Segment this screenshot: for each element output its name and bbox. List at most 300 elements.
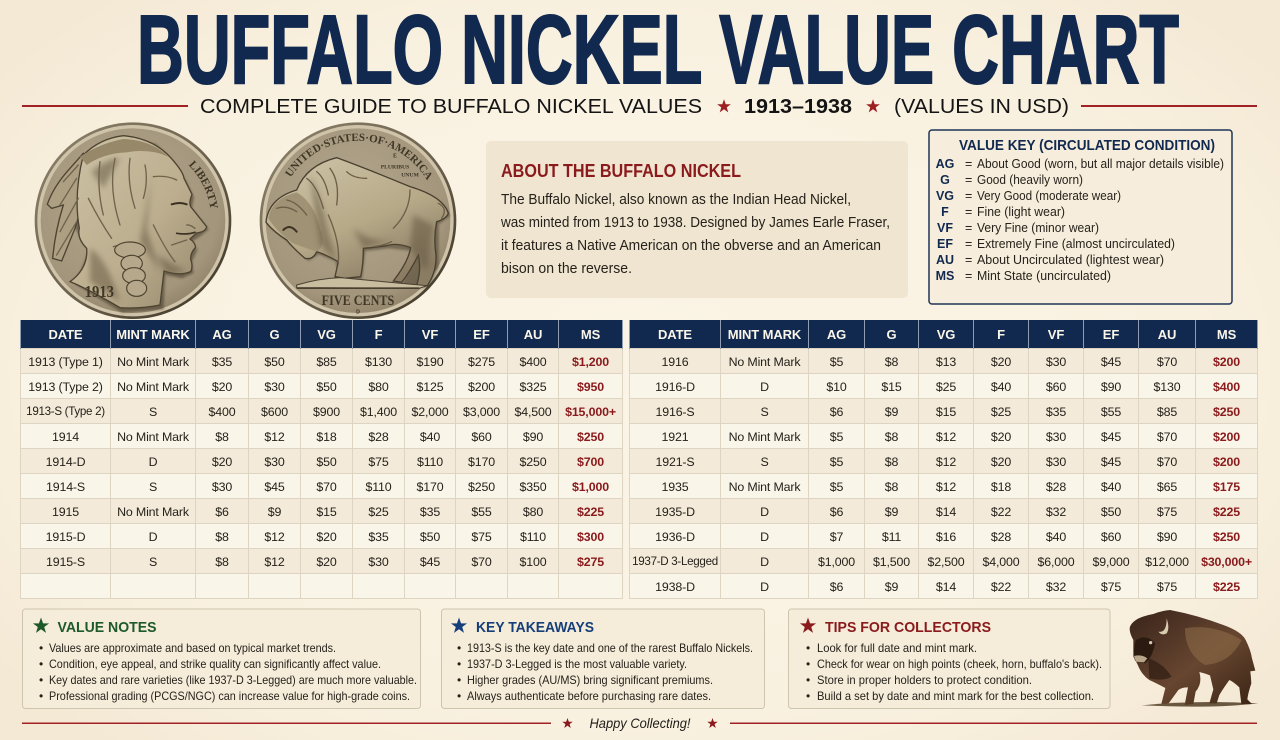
value key definitions: =	[965, 237, 972, 251]
table: 1913 to 1915 values: 1913-S (Type 2)	[26, 405, 105, 418]
table: 1913 to 1915 values: S	[149, 404, 157, 418]
table: 1916 to 1938 values: $40	[1046, 530, 1066, 544]
table: 1916 to 1938 values: D	[760, 504, 769, 518]
tips list: Look for full date and mint mark.	[817, 641, 977, 655]
table: 1913 to 1915 values: $50	[420, 530, 440, 544]
table: 1916 to 1938 values: $9,000	[1092, 554, 1130, 568]
table: 1916 to 1938 values: AG	[827, 326, 846, 342]
table: 1913 to 1915 values: $20	[212, 454, 232, 468]
about body text: it features a Native American on the obverse and an American	[501, 238, 881, 254]
table: 1913 to 1915 values: $225	[577, 504, 604, 518]
table: 1913 to 1915 values: No Mint Mark	[117, 354, 189, 368]
value key abbreviations: F	[941, 205, 949, 219]
tips list	[806, 641, 1102, 703]
table: 1916 to 1938 values: $12	[936, 480, 956, 494]
table: 1916 to 1938 values: $9	[885, 404, 898, 418]
table: 1916 to 1938 values: AU	[1158, 326, 1176, 342]
table: 1913 to 1915 values: AG	[212, 326, 232, 342]
table: 1913 to 1915 values: $6	[215, 504, 229, 518]
table: 1916 to 1938 values	[629, 320, 1258, 599]
value notes list	[39, 641, 417, 703]
table: 1916 to 1938 values: $15	[936, 404, 956, 418]
table: 1916 to 1938 values: $45	[1101, 354, 1121, 368]
table: 1916 to 1938 values: $9	[885, 504, 898, 518]
table: 1913 to 1915 values: $75	[471, 530, 492, 544]
table: 1916 to 1938 values: S	[760, 404, 769, 418]
icon: blue star	[451, 618, 467, 633]
table: 1916 to 1938 values: $10	[826, 380, 847, 394]
table: 1916 to 1938 values: VG	[937, 326, 955, 342]
table: 1913 to 1915 values: $12	[264, 554, 285, 568]
table: 1916 to 1938 values: $35	[1046, 404, 1066, 418]
table: 1916 to 1938 values: $70	[1157, 430, 1177, 444]
table: 1913 to 1915 values: $80	[523, 504, 543, 518]
table: 1916 to 1938 values: $6	[830, 580, 843, 594]
table: 1916 to 1938 values: $60	[1046, 380, 1066, 394]
illustration: bison	[1130, 610, 1258, 707]
table: 1913 to 1915 values: $950	[577, 380, 604, 394]
table: 1916 to 1938 values: MINT MARK	[728, 326, 801, 342]
table: 1916 to 1938 values: 1935-D	[655, 504, 695, 518]
key takeaways list	[457, 641, 753, 703]
table: 1916 to 1938 values: $75	[1157, 580, 1177, 594]
table: 1916 to 1938 values: $70	[1157, 454, 1177, 468]
table: 1916 to 1938 values: $22	[991, 580, 1011, 594]
value key abbreviations: MS	[936, 269, 954, 283]
table: 1913 to 1915 values: MS	[581, 326, 600, 342]
subtitle with rules and stars: 1913–1938	[744, 96, 852, 118]
table: 1916 to 1938 values: $20	[991, 430, 1011, 444]
table: 1913 to 1915 values: $90	[523, 430, 543, 444]
table: 1916 to 1938 values: $65	[1157, 480, 1177, 494]
value key heading: VALUE KEY (CIRCULATED CONDITION)	[959, 137, 1215, 154]
table: 1916 to 1938 values: $60	[1101, 530, 1121, 544]
table: 1913 to 1915 values: $2,000	[412, 404, 448, 418]
table: 1913 to 1915 values: $15	[316, 504, 337, 518]
panel: value key	[929, 130, 1232, 304]
table: 1913 to 1915 values: $170	[468, 454, 495, 468]
subtitle with rules and stars	[22, 96, 1257, 118]
table: 1913 to 1915 values: $325	[520, 380, 546, 394]
table: 1913 to 1915 values: $600	[261, 404, 288, 418]
table: 1913 to 1915 values: 1915-D	[46, 530, 85, 544]
value key definitions: =	[965, 189, 972, 203]
table: 1913 to 1915 values: $35	[212, 354, 232, 368]
table: 1916 to 1938 values: $200	[1213, 430, 1240, 444]
table: 1916 to 1938 values: 1916	[662, 354, 688, 368]
table: 1916 to 1938 values: DATE	[658, 326, 692, 342]
value key definitions: =	[965, 253, 972, 267]
table: 1913 to 1915 values: $1,200	[572, 354, 609, 368]
table: 1916 to 1938 values: $30,000+	[1201, 554, 1252, 568]
table: 1916 to 1938 values: $20	[991, 454, 1011, 468]
table: 1913 to 1915 values: $85	[316, 354, 337, 368]
table: 1913 to 1915 values: D	[149, 454, 157, 468]
panel: value notes	[22, 609, 420, 708]
table: 1916 to 1938 values: $400	[1213, 380, 1240, 394]
table: 1916 to 1938 values: 1921	[662, 430, 688, 444]
table: 1913 to 1915 values: $125	[417, 380, 443, 394]
value key definitions: About Good (worn, but all major details visible)	[977, 157, 1224, 171]
value notes list: •	[39, 689, 43, 703]
table: 1916 to 1938 values: $5	[830, 480, 843, 494]
table: 1916 to 1938 values: VF	[1048, 326, 1064, 342]
table: 1916 to 1938 values: $16	[936, 530, 956, 544]
table: 1916 to 1938 values: No Mint Mark	[729, 354, 800, 368]
table: 1913 to 1915 values: $8	[215, 430, 229, 444]
table: 1916 to 1938 values: $14	[936, 504, 956, 518]
table: 1916 to 1938 values: 1921-S	[655, 454, 695, 468]
table: 1913 to 1915 values: $3,000	[463, 404, 500, 418]
icon: footer star right	[707, 718, 718, 728]
table: 1913 to 1915 values: $8	[215, 530, 229, 544]
table: 1913 to 1915 values: $190	[417, 354, 443, 368]
value notes list: •	[39, 673, 43, 687]
value key definitions: =	[965, 205, 972, 219]
table: 1916 to 1938 values: $1,000	[818, 554, 855, 568]
table: 1913 to 1915 values: $70	[471, 554, 492, 568]
value key definitions	[965, 157, 1224, 283]
key takeaways list: 1913-S is the key date and one of the rarest Buffalo Nickels.	[467, 641, 753, 655]
table: 1913 to 1915 values: $50	[264, 354, 285, 368]
value key abbreviations: AG	[936, 157, 954, 171]
key takeaways list: •	[457, 657, 461, 671]
table: 1916 to 1938 values: $12	[936, 430, 956, 444]
table: 1913 to 1915 values: F	[375, 326, 382, 342]
table: 1916 to 1938 values: $18	[991, 480, 1011, 494]
table: 1916 to 1938 values: S	[760, 454, 769, 468]
table: 1913 to 1915 values: $400	[209, 404, 235, 418]
table: 1916 to 1938 values: $40	[991, 380, 1011, 394]
table: 1916 to 1938 values: $13	[936, 354, 956, 368]
table: 1916 to 1938 values: $45	[1101, 454, 1121, 468]
table: 1916 to 1938 values: $8	[885, 480, 898, 494]
table: 1913 to 1915 values: $110	[365, 480, 392, 494]
coin: bison reverse: E	[393, 154, 397, 160]
subtitle with rules and stars: (VALUES IN USD)	[894, 96, 1069, 118]
table: 1916 to 1938 values: $6	[830, 404, 843, 418]
table: 1916 to 1938 values: D	[760, 530, 769, 544]
table: 1913 to 1915 values: $275	[577, 554, 604, 568]
table: 1916 to 1938 values: $5	[830, 354, 843, 368]
table: 1916 to 1938 values: $30	[1046, 454, 1066, 468]
coin: bison reverse: UNITED·STATES·OF·AMERICA	[284, 134, 432, 180]
table: 1913 to 1915 values: 1915-S	[46, 554, 85, 568]
table: 1916 to 1938 values: $85	[1157, 404, 1177, 418]
table: 1913 to 1915 values: $20	[316, 530, 337, 544]
table: 1913 to 1915 values: MINT MARK	[116, 326, 190, 342]
table: 1913 to 1915 values: $12	[264, 530, 285, 544]
table: 1913 to 1915 values: $900	[313, 404, 340, 418]
table: 1916 to 1938 values: $32	[1046, 580, 1066, 594]
table: 1916 to 1938 values: MS	[1217, 326, 1236, 342]
table: 1916 to 1938 values: $22	[991, 504, 1011, 518]
value key definitions: Good (heavily worn)	[977, 173, 1083, 187]
table: 1913 to 1915 values	[20, 320, 623, 599]
table: 1913 to 1915 values: $4,500	[514, 404, 552, 418]
about body text: was minted from 1913 to 1938. Designed by James Earle Fraser,	[500, 215, 890, 231]
table: 1913 to 1915 values: S	[149, 554, 157, 568]
key takeaways list: •	[457, 673, 461, 687]
table: 1913 to 1915 values: $35	[368, 530, 389, 544]
table: 1916 to 1938 values: No Mint Mark	[729, 480, 800, 494]
tips heading: TIPS FOR COLLECTORS	[825, 619, 991, 636]
table: 1916 to 1938 values: $70	[1157, 354, 1177, 368]
table: 1916 to 1938 values: $30	[1046, 430, 1066, 444]
value key definitions: Fine (light wear)	[977, 205, 1065, 219]
table: 1913 to 1915 values: 1914-D	[46, 454, 85, 468]
table: 1913 to 1915 values: $30	[212, 480, 232, 494]
value key abbreviations: G	[940, 173, 950, 187]
table: 1916 to 1938 values: $12,000	[1145, 554, 1189, 568]
table: 1913 to 1915 values: No Mint Mark	[117, 504, 189, 518]
table: 1913 to 1915 values: $200	[468, 380, 495, 394]
table: 1916 to 1938 values: $75	[1101, 580, 1121, 594]
table: 1916 to 1938 values: $1,500	[873, 554, 910, 568]
table: 1913 to 1915 values: $100	[520, 554, 546, 568]
tips list: •	[806, 673, 810, 687]
table: 1913 to 1915 values: No Mint Mark	[117, 430, 189, 444]
table: 1916 to 1938 values: 1916-D	[655, 380, 695, 394]
coin: bison reverse: FIVE CENTS	[322, 293, 394, 309]
table: 1916 to 1938 values: $4,000	[982, 554, 1020, 568]
coin: bison reverse	[260, 122, 456, 319]
table: 1916 to 1938 values: 1916-S	[655, 404, 695, 418]
table: 1916 to 1938 values: $6,000	[1038, 554, 1074, 568]
table: 1913 to 1915 values: $30	[264, 380, 285, 394]
table: 1913 to 1915 values: G	[269, 326, 280, 342]
table: 1913 to 1915 values: 1913 (Type 2)	[28, 380, 103, 394]
table: 1913 to 1915 values: $75	[368, 454, 389, 468]
table: 1916 to 1938 values: $250	[1213, 404, 1240, 418]
table: 1913 to 1915 values: $9	[268, 504, 281, 518]
table: 1916 to 1938 values: $55	[1101, 404, 1121, 418]
table: 1913 to 1915 values: $18	[316, 430, 337, 444]
table: 1913 to 1915 values: $110	[417, 454, 443, 468]
table: 1916 to 1938 values: $175	[1213, 480, 1240, 494]
coin: bison reverse: D	[356, 309, 360, 315]
table: 1916 to 1938 values: $20	[991, 354, 1011, 368]
table: 1913 to 1915 values: VF	[422, 326, 438, 342]
value key abbreviations: VF	[937, 221, 953, 235]
coin: bison reverse: PLURIBUS	[381, 164, 409, 170]
value notes list: Condition, eye appeal, and strike quality can significantly affect value.	[49, 657, 381, 671]
table: 1913 to 1915 values: $12	[264, 430, 285, 444]
value key definitions: =	[965, 269, 972, 283]
table: 1916 to 1938 values: $90	[1101, 380, 1121, 394]
table: 1916 to 1938 values: 1937-D 3-Legged	[632, 555, 718, 568]
table: 1916 to 1938 values: 1935	[662, 480, 688, 494]
table: 1913 to 1915 values: $275	[468, 354, 495, 368]
table: 1913 to 1915 values: $1,000	[572, 480, 609, 494]
table: 1913 to 1915 values: $80	[368, 380, 389, 394]
panel: key takeaways	[442, 609, 764, 708]
table: 1913 to 1915 values: $250	[577, 430, 604, 444]
table: 1913 to 1915 values: No Mint Mark	[117, 380, 189, 394]
value notes list: •	[39, 641, 43, 655]
table: 1916 to 1938 values: G	[886, 326, 896, 342]
table: 1916 to 1938 values: EF	[1103, 326, 1119, 342]
value notes list: •	[39, 657, 43, 671]
footer	[22, 715, 1257, 731]
value key abbreviations: EF	[937, 237, 953, 251]
table: 1916 to 1938 values: $6	[830, 504, 843, 518]
table: 1916 to 1938 values: 1938-D	[655, 580, 695, 594]
about body text: bison on the reverse.	[501, 261, 632, 277]
table: 1913 to 1915 values: $45	[264, 480, 285, 494]
table: 1913 to 1915 values: $28	[368, 430, 389, 444]
table: 1916 to 1938 values: $8	[885, 454, 898, 468]
key takeaways list: 1937-D 3-Legged is the most valuable variety.	[467, 657, 687, 671]
tips list: Check for wear on high points (cheek, horn, buffalo's back).	[817, 657, 1102, 671]
coin: Indian Head obverse	[34, 122, 232, 319]
table: 1916 to 1938 values: $200	[1213, 354, 1240, 368]
table: 1913 to 1915 values: $1,400	[360, 404, 397, 418]
table: 1916 to 1938 values: $8	[885, 354, 898, 368]
table: 1913 to 1915 values: $250	[468, 480, 495, 494]
key takeaways list: Higher grades (AU/MS) bring significant premiums.	[467, 673, 713, 687]
table: 1913 to 1915 values: VG	[317, 326, 336, 342]
table: 1913 to 1915 values: 1915	[52, 504, 79, 518]
table: 1916 to 1938 values: $50	[1101, 504, 1121, 518]
table: 1916 to 1938 values: $14	[936, 580, 956, 594]
table: 1913 to 1915 values: $30	[264, 454, 285, 468]
table: 1913 to 1915 values: $70	[316, 480, 337, 494]
table: 1913 to 1915 values: $8	[215, 554, 229, 568]
table: 1913 to 1915 values: $170	[417, 480, 443, 494]
table: 1916 to 1938 values: $15	[881, 380, 902, 394]
value key definitions: =	[965, 157, 972, 171]
table: 1916 to 1938 values: F	[997, 326, 1005, 342]
table: 1913 to 1915 values: $60	[471, 430, 492, 444]
about heading: ABOUT THE BUFFALO NICKEL	[501, 161, 741, 181]
table: 1916 to 1938 values: $7	[830, 530, 843, 544]
table: 1913 to 1915 values: $300	[577, 530, 604, 544]
tips list: •	[806, 689, 810, 703]
table: 1916 to 1938 values: $250	[1213, 530, 1240, 544]
value notes list: Values are approximate and based on typical market trends.	[49, 641, 336, 655]
table: 1913 to 1915 values: DATE	[48, 326, 83, 342]
table: 1913 to 1915 values: $20	[316, 554, 337, 568]
table: 1913 to 1915 values: $15,000+	[565, 404, 616, 418]
table: 1913 to 1915 values: AU	[524, 326, 542, 342]
table: 1913 to 1915 values: $45	[420, 554, 440, 568]
value key definitions: Mint State (uncirculated)	[977, 269, 1111, 283]
table: 1916 to 1938 values: No Mint Mark	[729, 430, 800, 444]
table: 1916 to 1938 values: $28	[1046, 480, 1066, 494]
table: 1916 to 1938 values: D	[760, 554, 769, 568]
table: 1916 to 1938 values: $75	[1157, 504, 1177, 518]
table: 1916 to 1938 values: $28	[991, 530, 1011, 544]
subtitle with rules and stars: COMPLETE GUIDE TO BUFFALO NICKEL VALUES	[200, 96, 702, 118]
table: 1916 to 1938 values: $32	[1046, 504, 1066, 518]
table: 1913 to 1915 values: $35	[420, 504, 440, 518]
table: 1913 to 1915 values: $55	[471, 504, 492, 518]
table: 1916 to 1938 values: $25	[936, 380, 956, 394]
table: 1913 to 1915 values: $50	[316, 454, 337, 468]
about body text: The Buffalo Nickel, also known as the Indian Head Nickel,	[501, 192, 851, 208]
table: 1913 to 1915 values: $400	[520, 354, 546, 368]
value key definitions: Very Fine (minor wear)	[977, 221, 1099, 235]
footer text: Happy Collecting!	[590, 715, 691, 731]
coin: bison reverse: UNUM	[401, 173, 419, 179]
table: 1916 to 1938 values: 1936-D	[655, 530, 695, 544]
table: 1916 to 1938 values: $30	[1046, 354, 1066, 368]
table: 1913 to 1915 values: $20	[212, 380, 232, 394]
tips list: •	[806, 641, 810, 655]
value key abbreviations: AU	[936, 253, 954, 267]
panel: tips for collectors	[788, 609, 1110, 708]
value key definitions: Extremely Fine (almost uncirculated)	[977, 237, 1175, 251]
panel: about the Buffalo Nickel	[486, 141, 908, 298]
key takeaways list: •	[457, 689, 461, 703]
table: 1916 to 1938 values: D	[760, 380, 769, 394]
key takeaways list: •	[457, 641, 461, 655]
table: 1916 to 1938 values: $2,500	[928, 554, 964, 568]
value key definitions: Very Good (moderate wear)	[977, 189, 1121, 203]
table: 1916 to 1938 values: $5	[830, 454, 843, 468]
table: 1916 to 1938 values: $130	[1154, 380, 1180, 394]
value key definitions: About Uncirculated (lightest wear)	[977, 253, 1164, 267]
table: 1916 to 1938 values: $12	[936, 454, 956, 468]
table: 1913 to 1915 values: $250	[520, 454, 546, 468]
tips list: Build a set by date and mint mark for the best collection.	[817, 689, 1094, 703]
coin: Indian Head obverse: 1913	[85, 282, 114, 301]
table: 1913 to 1915 values: $40	[420, 430, 440, 444]
table: 1913 to 1915 values: 1913 (Type 1)	[28, 354, 103, 368]
table: 1916 to 1938 values: $90	[1157, 530, 1177, 544]
icon: footer star left	[562, 718, 573, 728]
value key definitions: =	[965, 221, 972, 235]
table: 1916 to 1938 values: $11	[882, 530, 901, 544]
about body text	[500, 192, 890, 277]
value key definitions: =	[965, 173, 972, 187]
table: 1916 to 1938 values: $45	[1101, 430, 1121, 444]
table: 1913 to 1915 values: $130	[365, 354, 392, 368]
tips list: •	[806, 657, 810, 671]
table: 1913 to 1915 values: EF	[473, 326, 490, 342]
table: 1913 to 1915 values: $350	[520, 480, 546, 494]
coin: Indian Head obverse: LIBERTY	[188, 160, 218, 208]
icon: green star	[33, 618, 49, 633]
table: 1913 to 1915 values: $30	[368, 554, 389, 568]
icon: red star	[800, 618, 816, 633]
table: 1916 to 1938 values: $200	[1213, 454, 1240, 468]
table: 1913 to 1915 values: 1914-S	[46, 480, 85, 494]
value notes list: Key dates and rare varieties (like 1937-D 3-Legged) are much more valuable.	[49, 673, 417, 687]
table: 1913 to 1915 values: $700	[577, 454, 604, 468]
key takeaways list: Always authenticate before purchasing rare dates.	[467, 689, 711, 703]
table: 1916 to 1938 values: $225	[1213, 580, 1240, 594]
tips list: Store in proper holders to protect condition.	[817, 673, 1032, 687]
table: 1913 to 1915 values: D	[149, 530, 157, 544]
table: 1916 to 1938 values: $225	[1213, 504, 1240, 518]
key takeaways heading: KEY TAKEAWAYS	[476, 619, 594, 636]
table: 1916 to 1938 values: $25	[991, 404, 1011, 418]
table: 1913 to 1915 values: S	[149, 480, 157, 494]
value key abbreviations: VG	[936, 189, 954, 203]
value notes list: Professional grading (PCGS/NGC) can increase value for high-grade coins.	[49, 689, 410, 703]
table: 1913 to 1915 values: $25	[368, 504, 389, 518]
table: 1913 to 1915 values: $110	[520, 530, 546, 544]
table: 1916 to 1938 values: $9	[885, 580, 898, 594]
table: 1916 to 1938 values: D	[760, 580, 769, 594]
table: 1916 to 1938 values: $40	[1101, 480, 1121, 494]
value notes heading: VALUE NOTES	[58, 619, 156, 636]
table: 1916 to 1938 values: $8	[885, 430, 898, 444]
value key abbreviations	[936, 157, 954, 283]
table: 1913 to 1915 values: $50	[316, 380, 337, 394]
